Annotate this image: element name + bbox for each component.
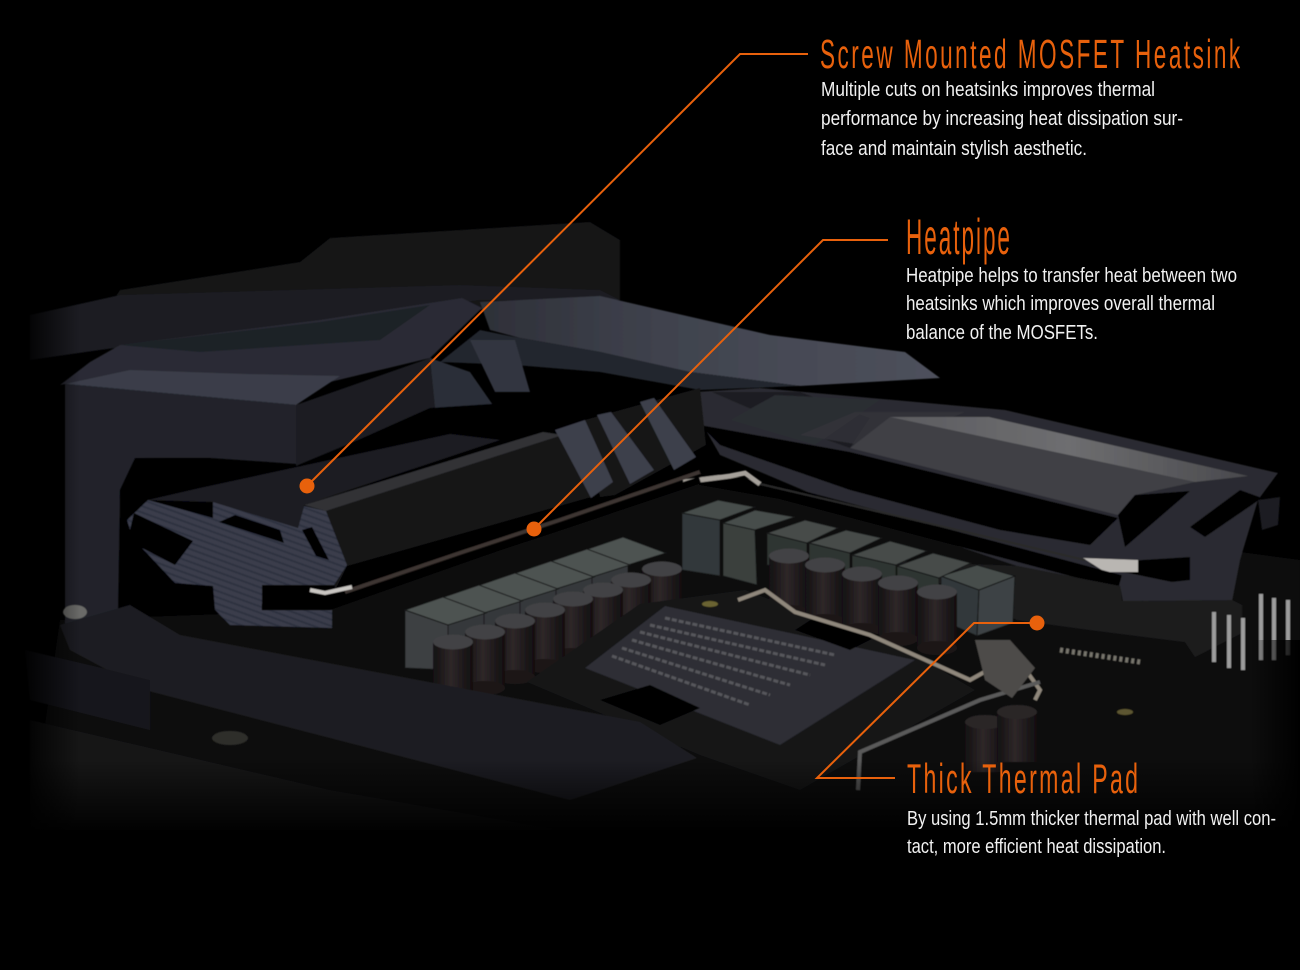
socket marking pads [702, 601, 718, 607]
heading: Screw Mounted MOSFET Heatsink [820, 32, 1241, 78]
callout: Thick Thermal Pad [817, 616, 1276, 858]
right heatsink recess [700, 425, 1118, 545]
shroud block top [65, 370, 340, 405]
description: tact, more efficient heat dissipation. [907, 836, 1166, 858]
left heatsink front face [326, 435, 591, 590]
heading: Thick Thermal Pad [907, 756, 1138, 803]
lower board details [30, 720, 560, 830]
left capacitors [433, 562, 682, 705]
right heatsink front plate [850, 417, 1195, 515]
left heatsink bevel [304, 432, 563, 511]
heatsink lower block [870, 560, 1242, 657]
left heatsink stripes [555, 388, 706, 498]
description: Heatpipe helps to transfer heat between two [906, 265, 1237, 287]
solder pad [1117, 709, 1133, 715]
M.2 heatsink edge [145, 690, 700, 825]
rear shroud [100, 222, 620, 320]
marker dot [300, 478, 314, 494]
heatpipe corner chrome [683, 473, 760, 484]
board caps [965, 705, 1037, 772]
marker dot [526, 522, 542, 536]
description: heatsinks which improves overall thermal [906, 293, 1215, 315]
callout: Screw Mounted MOSFET Heatsink [300, 32, 1241, 494]
PCIe slot [25, 650, 150, 730]
left heatsink top face [148, 434, 500, 528]
right capacitors [769, 548, 957, 655]
left chokes [405, 537, 666, 670]
leader line [307, 54, 808, 486]
dark gap under shroud [120, 390, 700, 620]
description: balance of the MOSFETs. [906, 322, 1098, 344]
CPU socket cover [585, 606, 915, 745]
shroud left cover [60, 298, 482, 385]
left heatpipe [345, 472, 700, 592]
header pins [1214, 594, 1288, 670]
right heatsink top plate [890, 417, 1248, 482]
heatpipe chrome end [310, 587, 352, 593]
description: face and maintain stylish aesthetic. [821, 138, 1087, 160]
right chokes [682, 500, 1015, 636]
smd components [1060, 650, 1140, 662]
shroud clips [430, 358, 495, 408]
motherboard illustration [25, 222, 1300, 830]
screw [63, 605, 87, 619]
description [907, 808, 1276, 858]
right heatsink fins [712, 392, 870, 448]
shroud wing fin [480, 296, 940, 386]
edge vignette [0, 280, 1300, 970]
leader line [817, 623, 1037, 778]
callout: Heatpipe [526, 210, 1237, 536]
description [906, 265, 1237, 344]
leader line [534, 240, 888, 529]
socket retention chrome [738, 590, 1040, 700]
socket clip [975, 640, 1035, 698]
description [821, 79, 1183, 160]
description: performance by increasing heat dissipation sur- [821, 108, 1183, 130]
board surface [30, 480, 1300, 830]
right heatsink: body [695, 388, 1278, 601]
right heatpipe chrome [1083, 558, 1138, 572]
CPU socket frame [527, 590, 975, 790]
socket frame cutouts [600, 617, 880, 725]
shroud block faces [65, 384, 296, 625]
M.2 heatsink top [60, 605, 697, 800]
description: Multiple cuts on heatsinks improves thermal [821, 79, 1155, 101]
right heatsink slots [1118, 491, 1190, 547]
marker dot [1030, 616, 1044, 630]
left heatsink end cap [127, 500, 347, 628]
heading: Heatpipe [906, 210, 1010, 266]
socket cover text lines [612, 618, 835, 705]
socket lever [858, 682, 1040, 790]
